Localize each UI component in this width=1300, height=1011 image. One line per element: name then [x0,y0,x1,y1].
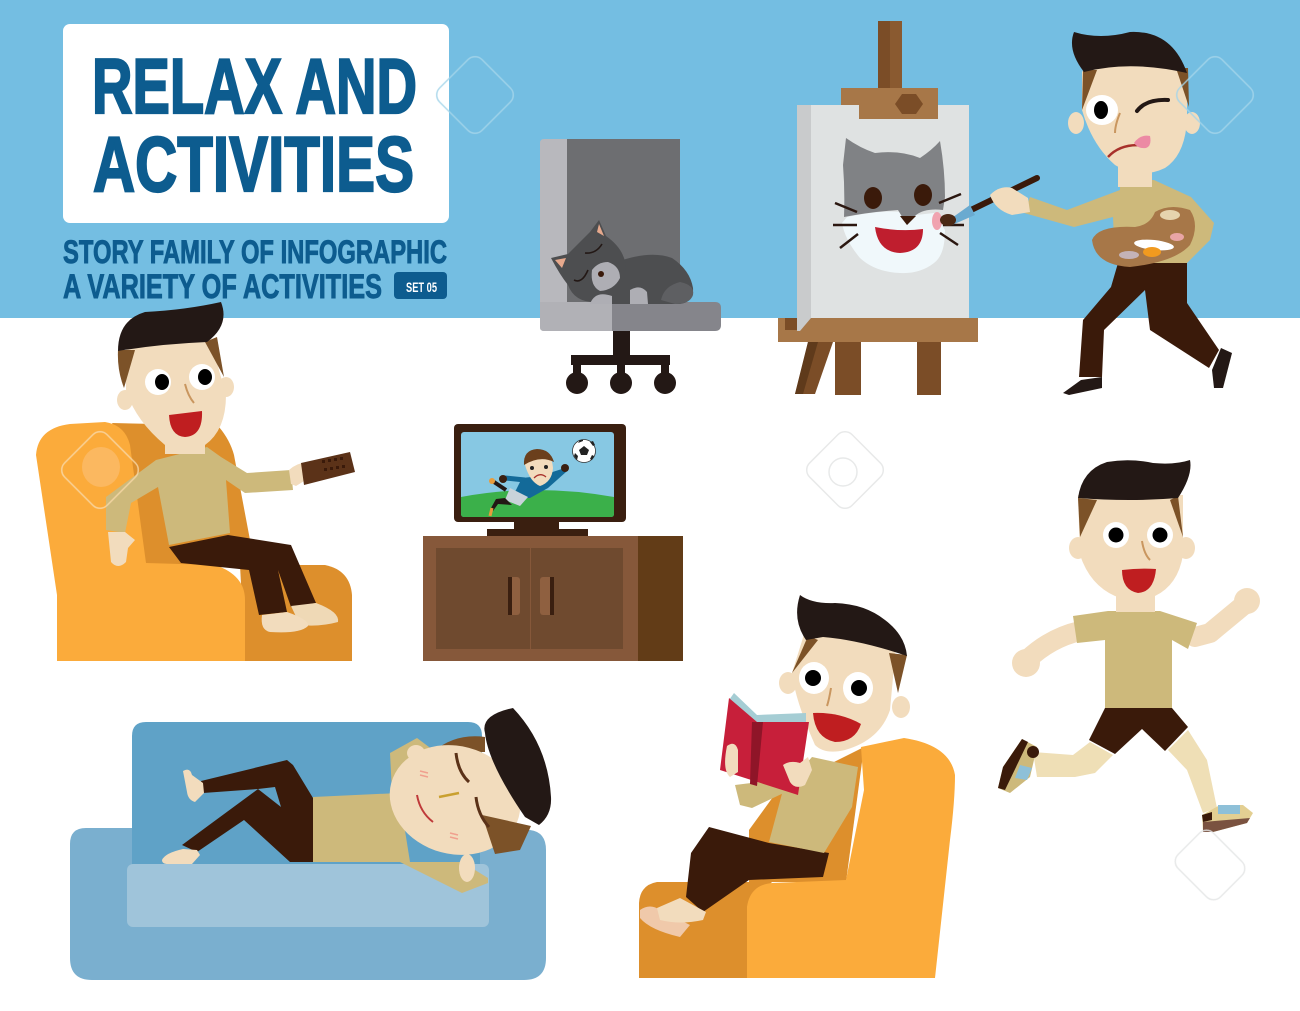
sleeping man feet [162,770,204,864]
watching man head [117,302,234,454]
canvas [797,94,969,331]
sleeping cat [551,220,693,304]
watching man pants [169,535,316,615]
sofa, man sleeping [70,708,551,980]
brush [940,178,1037,226]
reading man hands [725,744,812,787]
orange armchair [36,422,352,661]
runner front leg [1168,730,1217,813]
title card: RELAX AND [92,42,417,130]
easel and canvas with cat painting [778,21,978,395]
badge: set 05: SET 05 [406,279,437,295]
subtitle: A VARIETY OF ACTIVITIES [63,268,382,306]
office chair with sleeping cat [540,139,721,394]
badge: set 05 [394,272,447,299]
easel [778,21,978,395]
runner shirt [1073,611,1197,708]
title card [63,24,449,223]
runner back shoe [998,739,1039,793]
cabinet [423,536,683,661]
armchair, man reading [639,595,955,978]
sleeping man arms [390,738,488,893]
sleeping man pants [182,760,313,862]
background blue band [0,0,1300,318]
palette [1092,207,1195,267]
watching man sweater [106,447,293,545]
runner arms [1027,604,1245,660]
man painting [940,32,1232,395]
armchair, man watching tv [36,302,355,661]
title card: ACTIVITIES [93,120,414,208]
runner back leg [1033,742,1113,777]
runner head [1069,460,1195,612]
blue sofa [70,722,546,980]
painting of cat [833,138,964,273]
tv screen soccer player [489,449,569,516]
reading man sweater [735,757,858,853]
painter hand [990,187,1030,215]
sleeping man head [377,708,551,882]
soccer ball [572,440,596,462]
subtitle [63,234,447,306]
running man [998,460,1260,832]
orange armchair [639,738,955,978]
painter shoes [1063,348,1232,395]
feet [262,603,338,632]
runner hands [1012,588,1260,677]
reading man head [779,595,910,752]
watermarks [58,53,1257,904]
tv on cabinet [423,424,683,661]
sleeping man torso [313,793,410,862]
book [720,693,809,795]
reading man foot [640,898,706,937]
chair [540,139,721,394]
painter pants [1079,263,1219,377]
painter sweater [1024,180,1214,263]
runner shorts [1089,708,1188,754]
runner front shoe [1202,805,1253,832]
subtitle: STORY FAMILY OF INFOGRAPHIC [63,234,447,270]
reading man pants [686,827,829,912]
painter head [1068,32,1200,187]
hands and remote [108,452,355,566]
television [454,424,626,538]
